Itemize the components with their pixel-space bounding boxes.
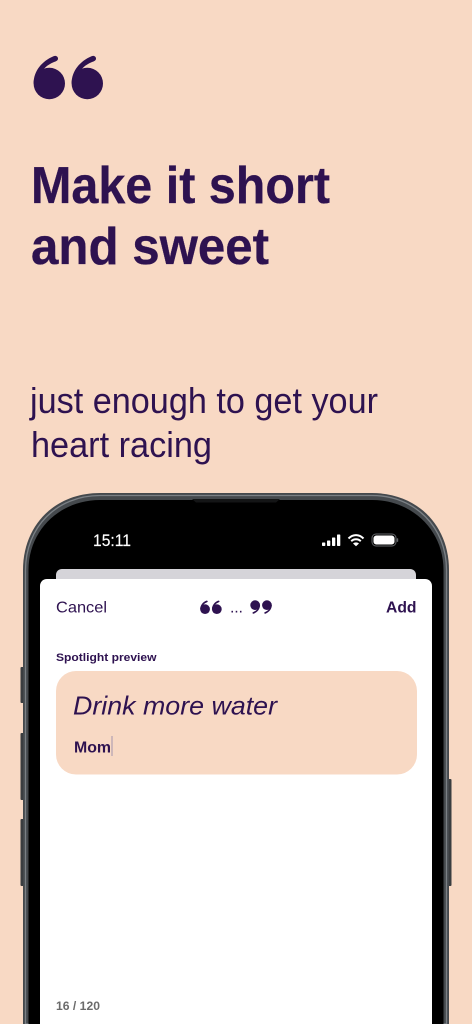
icon: opening quotation marks: [34, 56, 103, 99]
status bar icons: [322, 534, 398, 546]
phone frame: [23, 493, 449, 1024]
status bar time: 15:11: [93, 532, 131, 550]
subheading: heart racing: [31, 424, 212, 465]
subheading: just enough to get your: [29, 380, 378, 421]
heading: [31, 157, 330, 276]
add button: Add: [386, 600, 416, 616]
modal sheet: [40, 579, 432, 1024]
title quotes with ellipsis: ...: [230, 600, 243, 616]
cancel button: Cancel: [56, 600, 107, 616]
title quotes with ellipsis: [200, 600, 272, 616]
heading: and sweet: [31, 218, 269, 276]
side buttons: [20, 667, 452, 886]
quote text: Drink more water: [73, 690, 278, 720]
spotlight preview label: Spotlight preview: [56, 652, 157, 664]
spotlight preview card: [56, 671, 417, 774]
notch edge: [192, 499, 280, 502]
character counter: 16 / 120: [56, 1001, 100, 1013]
heading: Make it short: [31, 157, 330, 215]
subheading: [29, 380, 378, 465]
background sheet: [56, 569, 416, 580]
phone mockup: [20, 493, 452, 1024]
author text with caret: Mom: [74, 740, 111, 756]
